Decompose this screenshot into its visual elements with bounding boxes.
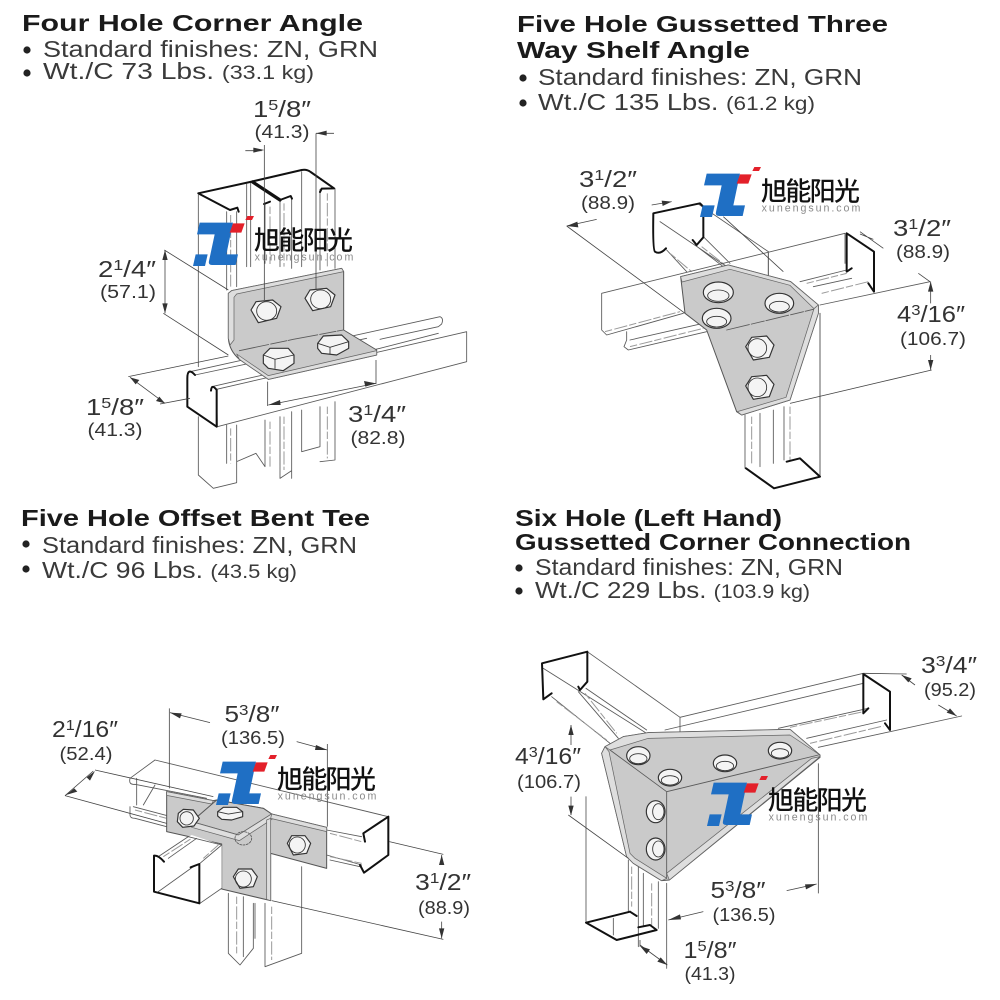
dimension label: 3 1/2: 3 (415, 869, 428, 895)
dimension label: 57.1: (57.1) (100, 282, 156, 302)
spec: finishes: Standard finishes: ZN, GRN (42, 532, 357, 558)
dimension label: 1 5/8 bottom: 5 (697, 938, 707, 955)
dimension label: 2 1/16: 1 (66, 717, 75, 734)
dimension lines (128, 133, 376, 406)
title line two: Gussetted Corner Connection (515, 529, 911, 555)
dimension label: 136.5: (136.5) (221, 728, 285, 748)
dimension label: 2 1/16: 2 (52, 716, 65, 742)
dimension label: 1 5/8 lower: 1 (86, 394, 99, 420)
dimension label: 5 3/8: 5 (224, 701, 237, 727)
dimension label: 5 3/8: 3 (239, 702, 248, 719)
dimension label: 1 5/8 lower: 5 (101, 395, 111, 412)
dimension label: 4 3/16: 3 (911, 302, 920, 319)
dimension label: 5 3/8 lower: 3 (725, 878, 734, 895)
logo: top right (700, 167, 860, 217)
dimension label: 3 1/4: 1 (363, 402, 373, 419)
right channel (665, 673, 962, 747)
dimension label: 1 5/8 lower: /8″ (111, 394, 144, 420)
dimension label: 1 5/8 bottom: 1 (684, 937, 696, 963)
dimension label: 4 3/16: 4 (897, 301, 910, 327)
title: five hole gussetted three way shelf angle: Five Hole Gussetted Three (517, 11, 888, 37)
dimension label: 5 3/8: /8″ (248, 701, 280, 727)
panel: four hole corner angle heading (22, 10, 378, 84)
dimension label: 82.8: (82.8) (350, 428, 406, 448)
dimension lines (65, 708, 443, 939)
logo: bottom right: 旭能阳光 (768, 785, 867, 815)
dimension label: 3 1/2: /2″ (439, 869, 471, 895)
diagram: five hole gussetted three way shelf angle (567, 201, 933, 488)
dimension label: 41.3 lower: (41.3) (88, 420, 142, 440)
dimension label: 2 1/16: /16″ (75, 716, 118, 742)
dimension label: 3 1/4: /4″ (373, 401, 406, 427)
dimension label: 2 1/4: 1 (113, 257, 123, 274)
dimension label: 95.2: (95.2) (924, 680, 976, 700)
dimension label: 52.4: (52.4) (60, 744, 112, 764)
panel: five hole offset bent tee heading (21, 505, 370, 583)
bolts (251, 300, 281, 323)
horizontal channel (602, 233, 930, 475)
dimension label: 106.7 lower: (106.7) (517, 772, 581, 792)
logo: top left (193, 216, 353, 266)
logo: top left: 旭能阳光 (254, 225, 353, 255)
dimension label: 4 3/16: /16″ (920, 301, 965, 327)
angle bracket (228, 268, 377, 379)
lower channel (586, 797, 667, 968)
title: four hole corner angle: Four Hole Corner Angle (22, 10, 363, 36)
logo: bottom right (707, 776, 867, 826)
title: five hole offset bent tee: Five Hole Offset Bent Tee (21, 505, 370, 531)
dimension label: 4 3/16 lower: 4 (515, 743, 528, 769)
dimension label: 5 3/8 lower: 5 (710, 877, 723, 903)
dimension label: 3 1/4: 3 (348, 401, 361, 427)
dimension label: 1 5/8 top: 1 (253, 96, 266, 122)
dimension label: 3 1/2: 1 (430, 870, 439, 887)
diagram: five hole offset bent tee (65, 708, 444, 967)
panel: six hole gussetted corner heading (515, 505, 911, 603)
dimension label: 4 3/16 lower: /16″ (538, 743, 581, 769)
diagram: six hole gussetted corner connection (542, 652, 962, 968)
gusset plate (602, 729, 820, 881)
panel: five hole gussetted heading (517, 11, 888, 115)
vertical channel (228, 867, 302, 967)
dimension label: 3 1/2 right: /2″ (918, 215, 951, 241)
dimension label: 5 3/8 lower: /8″ (734, 877, 766, 903)
logo: top right: 旭能阳光 (761, 176, 860, 206)
logo: top left: xunengsun.com (255, 251, 353, 263)
dimension label: 3 1/2 left: 1 (594, 167, 604, 184)
dimension label: 3 1/2 left: /2″ (604, 166, 637, 192)
dimension label: 41.3 top: (41.3) (254, 122, 310, 142)
horizontal channel (187, 317, 467, 427)
title line two: Way Shelf Angle (517, 37, 750, 63)
gusset plate (681, 265, 818, 415)
logo: bottom right: xunengsun.com (769, 811, 867, 823)
dimension label: 1 5/8 bottom: /8″ (707, 937, 736, 963)
spec: weight: Wt./C 135 Lbs. (61.2 kg) (538, 89, 815, 115)
dimension label: 88.9: (88.9) (418, 898, 470, 918)
tee plate (167, 792, 327, 901)
logo: bottom left (216, 755, 376, 805)
dimension label: 1 5/8 top: /8″ (278, 96, 311, 122)
vertical channel (745, 313, 820, 488)
dimension label: 88.9 right: (88.9) (896, 242, 950, 262)
logo: top right: xunengsun.com (762, 202, 860, 214)
holes (627, 747, 650, 765)
spec: finishes: Standard finishes: ZN, GRN (535, 554, 843, 580)
dimension lines (567, 202, 932, 403)
dimension label: 3 1/2 right: 3 (893, 215, 906, 241)
dimension label: 41.3 bottom: (41.3) (684, 964, 736, 984)
logo: bottom left: 旭能阳光 (277, 764, 376, 794)
dimension label: 106.7: (106.7) (900, 329, 966, 349)
dimension label: 136.5 lower: (136.5) (712, 905, 776, 925)
dimension label: 2 1/4: 2 (98, 256, 111, 282)
dimension label: 88.9 left: (88.9) (581, 193, 635, 213)
dimension label: 3 3/4: 3 (936, 653, 945, 670)
spec: weight: Wt./C 229 Lbs. (103.9 kg) (535, 577, 810, 603)
title: six hole left hand: Six Hole (Left Hand) (515, 505, 782, 531)
spec: weight: Wt./C 96 Lbs. (43.5 kg) (42, 557, 297, 583)
dimension label: 3 1/2 left: 3 (579, 166, 592, 192)
spec: finishes: Standard finishes: ZN, GRN (43, 36, 378, 62)
dimension lines (568, 673, 957, 965)
spec: finishes: Standard finishes: ZN, GRN (538, 64, 862, 90)
dimension label: 1 5/8 top: 5 (268, 97, 278, 114)
bolts (177, 809, 199, 827)
dimension label: 3 1/2 right: 1 (908, 216, 918, 233)
dimension label: 4 3/16 lower: 3 (529, 744, 538, 761)
diagram: four hole corner angle (128, 131, 467, 488)
dimension label: 2 1/4: /4″ (123, 256, 156, 282)
front channel (153, 835, 222, 903)
logo: bottom left: xunengsun.com (278, 790, 376, 802)
spec: weight: Wt./C 73 Lbs. (33.1 kg) (43, 58, 314, 84)
dimension label: 3 3/4: /4″ (945, 652, 977, 678)
dimension label: 3 3/4: 3 (921, 652, 934, 678)
holes (703, 282, 733, 303)
